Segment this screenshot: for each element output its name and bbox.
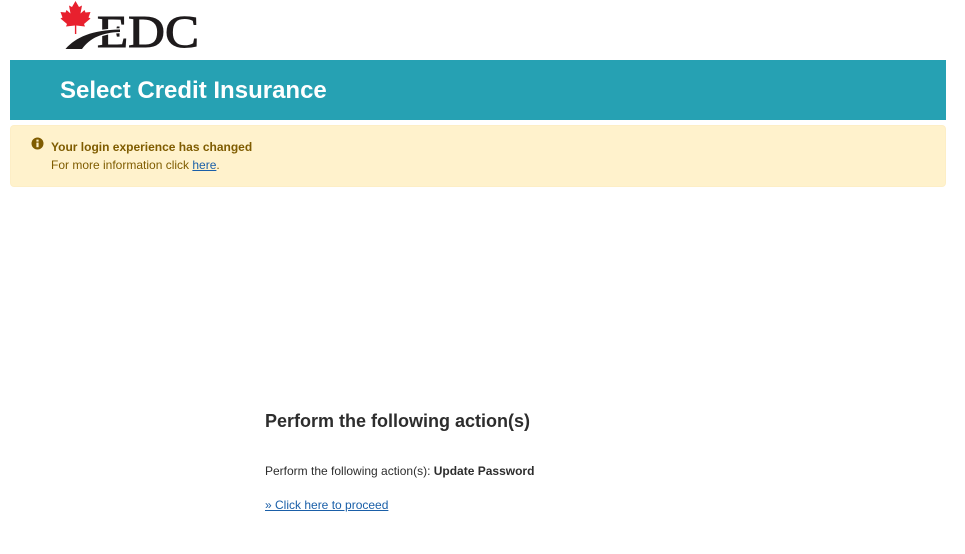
action text: Perform the following action(s): Update Password <box>265 464 534 478</box>
proceed link: » Click here to proceed <box>265 498 388 512</box>
icon: maple leaf <box>60 1 90 34</box>
header banner <box>10 60 946 120</box>
title: Select Credit Insurance <box>60 77 327 104</box>
logo swoosh <box>66 30 120 49</box>
icon: info <box>32 138 44 150</box>
callout: login notice <box>10 125 946 187</box>
notice text: For more information click here. <box>51 158 220 172</box>
logo: EDC <box>60 1 199 54</box>
notice heading: Your login experience has changed <box>51 140 252 154</box>
section heading: Perform the following action(s) <box>265 411 530 431</box>
